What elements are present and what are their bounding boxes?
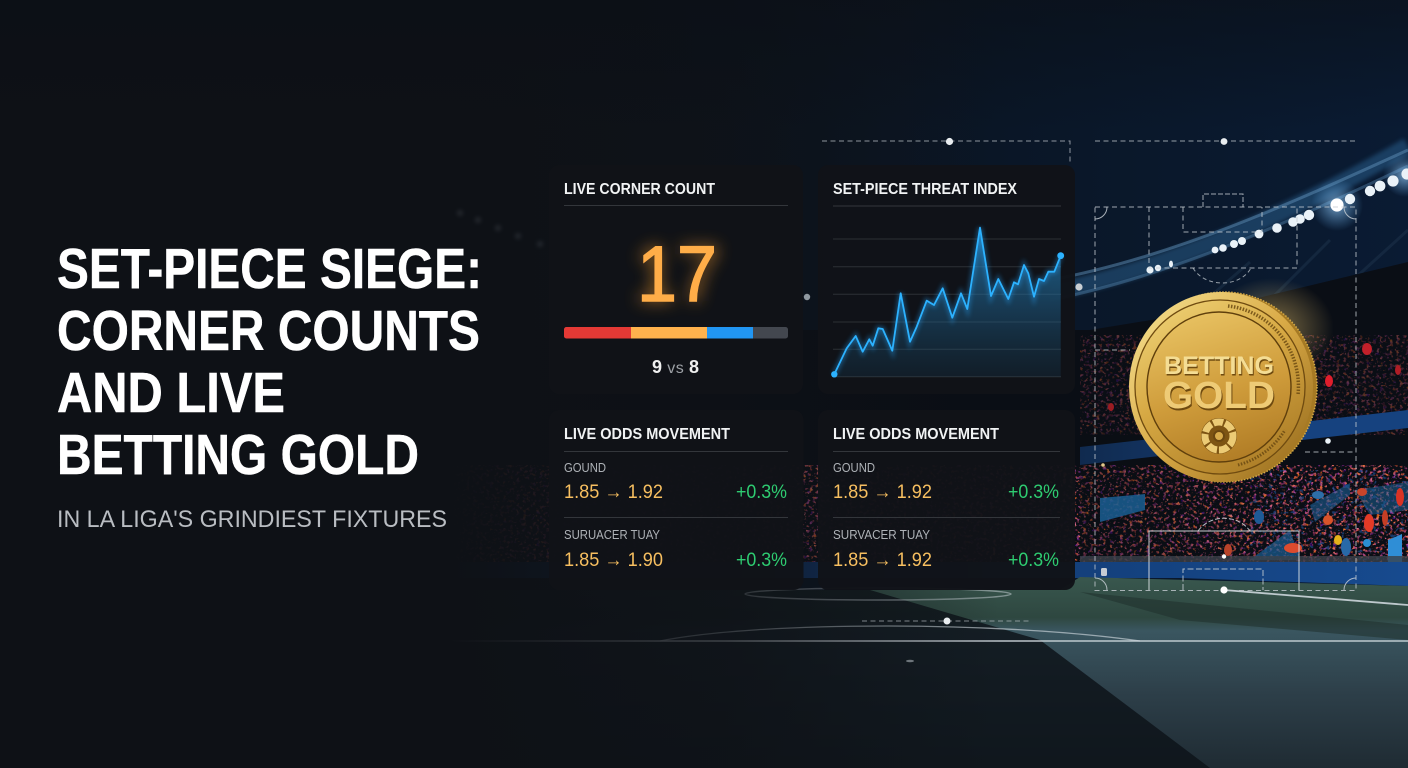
corner share bar — [564, 327, 788, 338]
title: AND LIVE — [57, 361, 285, 425]
odds row: gound right: GOUND — [833, 461, 875, 475]
odds row: suruacer tuay — [564, 528, 787, 571]
big number: 17 — [637, 229, 717, 318]
pitch diagram nodes — [944, 138, 1228, 624]
coin lettering: BETTING — [1164, 352, 1274, 380]
coin glow — [1210, 278, 1334, 378]
lower crowd shade — [1080, 430, 1310, 562]
distant stadium lights — [457, 210, 543, 247]
odds row: gound right — [833, 461, 1059, 503]
odds row: gound right: +0.3% — [1008, 482, 1059, 503]
title: SET-PIECE SIEGE: — [57, 237, 482, 301]
stand base — [450, 262, 1408, 562]
odds row: survacer tuay — [833, 528, 1059, 571]
coin football emblem — [1201, 418, 1237, 454]
stand blue band — [1080, 410, 1408, 465]
heading: live corner count: LIVE CORNER COUNT — [564, 181, 715, 198]
odds row: survacer tuay: SURVACER TUAY — [833, 528, 931, 542]
odds row: suruacer tuay: 1.85 → 1.90 — [564, 550, 663, 571]
odds row: gound right: 1.85 → 1.92 — [833, 482, 932, 503]
stadium roof truss — [1050, 146, 1408, 340]
panel: live odds movement right — [818, 410, 1075, 590]
coin lettering: BETTING — [1165, 354, 1275, 382]
blue hoarding — [450, 562, 1408, 586]
lower crowd tier — [450, 465, 1408, 562]
icon: betting gold coin — [1129, 292, 1317, 482]
heading: odds left: LIVE ODDS MOVEMENT — [564, 426, 730, 443]
odds row: survacer tuay: 1.85 → 1.92 — [833, 550, 932, 571]
dashed pitch diagram — [822, 141, 1357, 621]
stadium lights — [804, 153, 1408, 576]
odds row: gound — [564, 461, 787, 503]
panel: live odds movement left — [549, 410, 804, 590]
panel: live corner count — [549, 165, 803, 394]
coin edge inscription — [1228, 306, 1298, 465]
corner score: 9 vs 8 — [652, 357, 699, 377]
heading: threat index: SET-PIECE THREAT INDEX — [833, 181, 1018, 198]
pitch shadow — [450, 590, 1210, 768]
hoarding rail — [1080, 556, 1408, 562]
big number glow: 17 — [633, 229, 721, 318]
blue stand panels — [1100, 482, 1408, 560]
odds row: survacer tuay: +0.3% — [1008, 550, 1059, 571]
coin lettering — [1163, 352, 1276, 419]
subtitle: IN LA LIGA'S GRINDIEST FIXTURES — [57, 506, 447, 533]
lower crowd blue shirts — [1250, 470, 1408, 562]
odds row: gound: +0.3% — [736, 482, 787, 503]
odds row: gound: 1.85 → 1.92 — [564, 482, 663, 503]
spectators and flags — [1108, 343, 1404, 562]
odds row: suruacer tuay: SURUACER TUAY — [564, 528, 661, 542]
area line chart — [831, 228, 1064, 377]
coin lettering: GOLD — [1163, 375, 1275, 417]
odds row: suruacer tuay: +0.3% — [736, 550, 787, 571]
title: BETTING GOLD — [57, 423, 419, 487]
title: CORNER COUNTS — [57, 299, 480, 363]
title — [57, 237, 482, 487]
odds row: gound: GOUND — [564, 461, 606, 475]
panel: set-piece threat index — [818, 165, 1075, 394]
pitch markings — [450, 588, 1408, 641]
pitch — [450, 577, 1408, 768]
heading: odds right: LIVE ODDS MOVEMENT — [833, 426, 999, 443]
coin lettering: GOLD — [1164, 377, 1276, 419]
upper crowd tier — [1080, 335, 1408, 435]
